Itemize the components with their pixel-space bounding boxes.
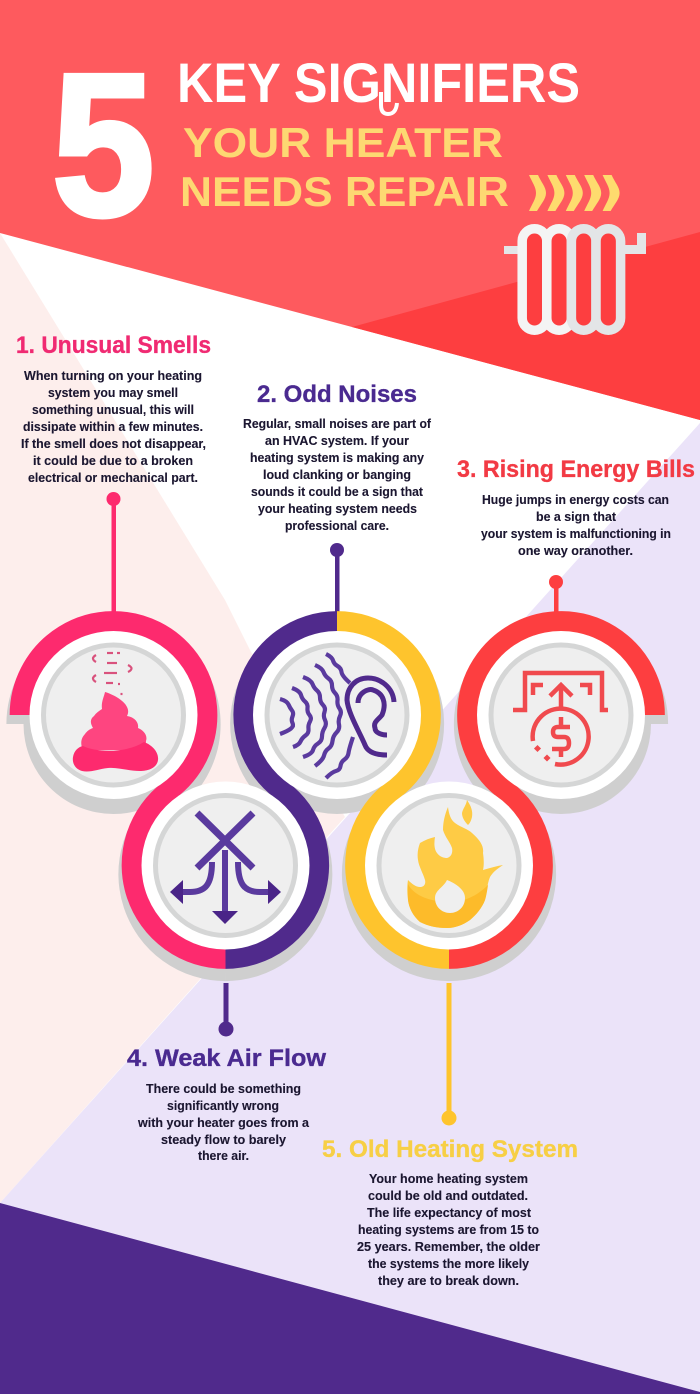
chart: linked colour rings [20,621,655,959]
icon: swirl smell pile [73,653,158,772]
title line: key signifiers: KEY SIGNIFIERS [177,51,580,114]
text: old heating system body [357,1172,540,1288]
text: old heating system body: Your home heating system [369,1172,528,1186]
background: lavender wedge [0,423,700,1394]
callout: unusual smells [16,332,211,485]
callout: weak air flow [127,1045,327,1163]
title line: your heater: YOUR HEATER [183,119,503,166]
heading: odd noises: 2. Odd Noises [257,381,417,408]
text: unusual smells body: it could be due to a broken [33,454,193,468]
background: dark red header facet [352,232,700,420]
big numeral 5: 5 [52,32,154,259]
text: odd noises body: your heating system needs [258,502,417,516]
text: old heating system body: heating systems are from 15 to [358,1223,539,1237]
text: rising energy bills body: one way oranother. [518,544,633,558]
title line: needs repair: NEEDS REPAIR [180,168,509,215]
text: old heating system body: could be old and outdated. [368,1189,528,1203]
header: title block [52,32,580,259]
icon: rising cost [513,673,608,765]
text: unusual smells body: something unusual, this will [32,403,194,417]
callout: odd noises [243,381,432,533]
text: rising energy bills body: Huge jumps in energy costs can [482,493,669,507]
text: rising energy bills body: be a sign that [536,510,617,524]
connector: purple stem bottom [218,983,234,1036]
text: unusual smells body: If the smell does not disappear, [21,437,206,451]
background: pale pink wedge [0,233,345,1203]
text: old heating system body: the systems the more likely [368,1257,529,1271]
text: unusual smells body: system you may smell [48,386,178,400]
text: odd noises body: loud clanking or banging [263,468,411,482]
text: old heating system body: they are to break down. [378,1274,519,1288]
discs: white and grey icon plates [30,631,645,950]
heading: old heating system: 5. Old Heating System [322,1136,578,1163]
text: old heating system body: The life expectancy of most [367,1206,532,1220]
icon: sound waves and ear [280,654,394,778]
text: weak air flow body: with your heater goes from a [137,1116,310,1130]
text: weak air flow body: There could be something [146,1082,301,1096]
ring: red [449,621,655,959]
background: purple footer band [0,1203,700,1394]
ring: pink [20,621,226,959]
text: weak air flow body: there air. [198,1149,249,1163]
background: red header band [0,0,700,420]
ring: yellow [337,621,449,959]
text: unusual smells body: electrical or mechanical part. [28,471,198,485]
text: odd noises body: sounds it could be a sign that [251,485,424,499]
text: unusual smells body: dissipate within a few minutes. [23,420,203,434]
text: odd noises body: an HVAC system. If your [265,434,409,448]
callout: rising energy bills [457,456,695,558]
icon: flame [407,800,503,928]
text: weak air flow body: significantly wrong [167,1099,279,1113]
text: odd noises body: Regular, small noises are part of [243,417,432,431]
connector: purple stem top [330,543,344,614]
text: odd noises body: professional care. [285,519,389,533]
text: unusual smells body [21,369,206,485]
heading: unusual smells: 1. Unusual Smells [16,332,211,359]
text: weak air flow body [137,1082,310,1163]
text: unusual smells body: When turning on your heating [24,369,202,383]
text: rising energy bills body [481,493,671,558]
text: odd noises body [243,417,432,533]
chart: linked circle shadows [20,630,655,968]
ring: purple [226,621,337,959]
connector: red stem [549,575,563,612]
connector: yellow stem [442,983,456,1126]
text: rising energy bills body: your system is malfunctioning in [481,527,671,541]
text: odd noises body: heating system is making any [250,451,424,465]
icon: airflow blocked [170,813,281,924]
icon: radiator [504,229,646,330]
text: weak air flow body: steady flow to barely [161,1133,286,1147]
callout: old heating system [322,1136,578,1288]
icon: heat chevrons [529,175,620,211]
heading: weak air flow: 4. Weak Air Flow [127,1045,327,1072]
connector: pink stem [106,492,120,612]
text: old heating system body: 25 years. Remember, the older [357,1240,540,1254]
